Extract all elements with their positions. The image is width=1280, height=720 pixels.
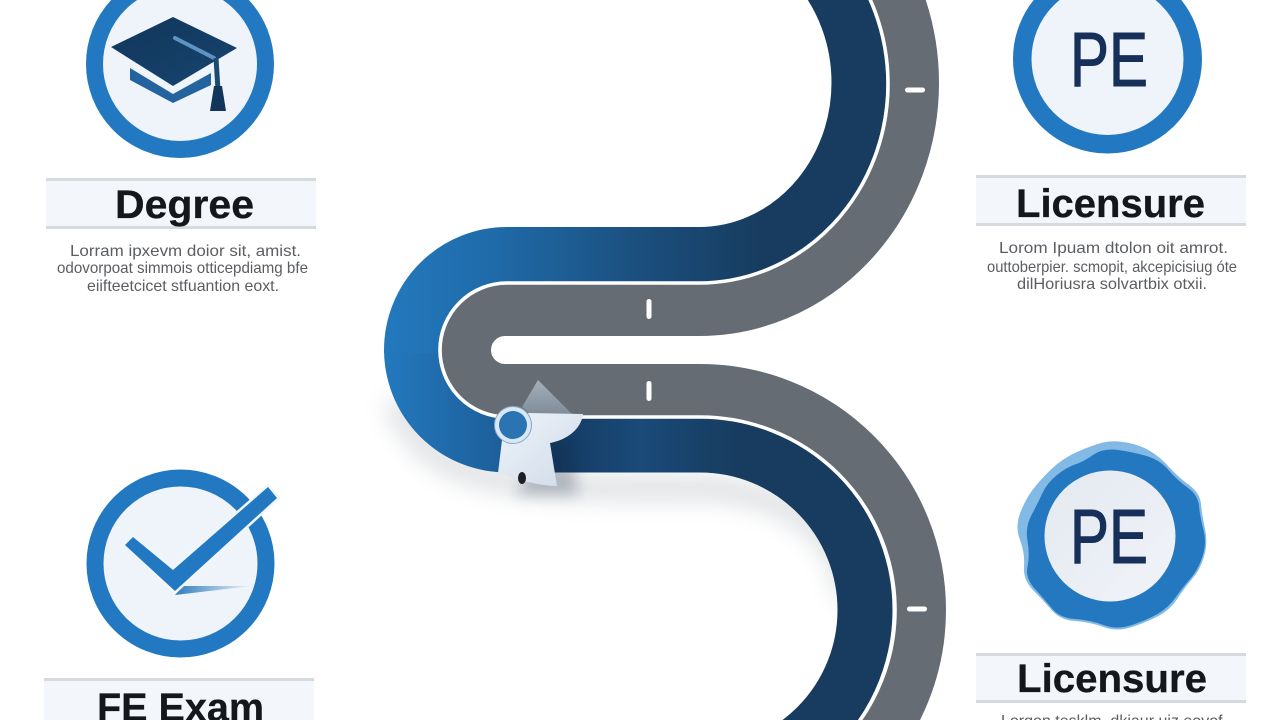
marker triangle: [522, 380, 572, 414]
icon: PE seal: [1018, 441, 1206, 630]
icon: check mark: [95, 478, 277, 649]
heading bar: [44, 678, 314, 720]
description: odovorpoat simmois otticepdiamg bfe: [57, 260, 308, 277]
icon: PE circle: PE: [1070, 17, 1148, 103]
icon: graduation cap: [94, 0, 266, 150]
lower blue ribbon: [412, 350, 865, 720]
heading bar: Licensure: [1017, 657, 1207, 701]
marker medallion: [494, 406, 532, 444]
step: FE Exam: [44, 478, 314, 720]
ribbon marker: [494, 380, 583, 495]
description: eiifteetcicet stfuantion eoxt.: [87, 278, 279, 295]
description: Lorom Ipuam dtolon oit amrot.: [999, 240, 1228, 257]
description: [987, 240, 1237, 293]
road shadow: [395, 400, 850, 600]
winding path: [412, 0, 927, 720]
description: Lorram ipxevm doior sit, amist.: [70, 243, 301, 260]
icon: PE circle: [1022, 0, 1193, 144]
step: Degree: [46, 0, 316, 295]
heading bar: Degree: [115, 183, 254, 227]
white edge line: [440, 0, 895, 720]
lane marking 3: [646, 381, 652, 401]
marker dot: [518, 472, 526, 484]
heading bar: [976, 653, 1246, 703]
description: [57, 243, 308, 295]
step: PE Licensure bottom: [976, 441, 1246, 720]
icon: PE seal: PE: [1070, 494, 1148, 580]
heading bar: Licensure: [1016, 182, 1205, 226]
marker shadow: [515, 440, 578, 495]
gray road: [465, 0, 920, 720]
heading bar: [976, 175, 1246, 226]
description: outtoberpier. scmopit, akcepicisiug óte: [987, 259, 1237, 276]
step: PE Licensure top: [976, 0, 1246, 293]
description: dilHoriusra solvartbix otxii.: [1017, 276, 1207, 293]
lane marking 4: [907, 606, 927, 612]
lane marking 1: [905, 88, 925, 92]
upper blue ribbon: [412, 0, 859, 353]
marker tail: [498, 413, 583, 486]
heading bar: [46, 178, 316, 229]
lane marking 2: [646, 299, 652, 319]
